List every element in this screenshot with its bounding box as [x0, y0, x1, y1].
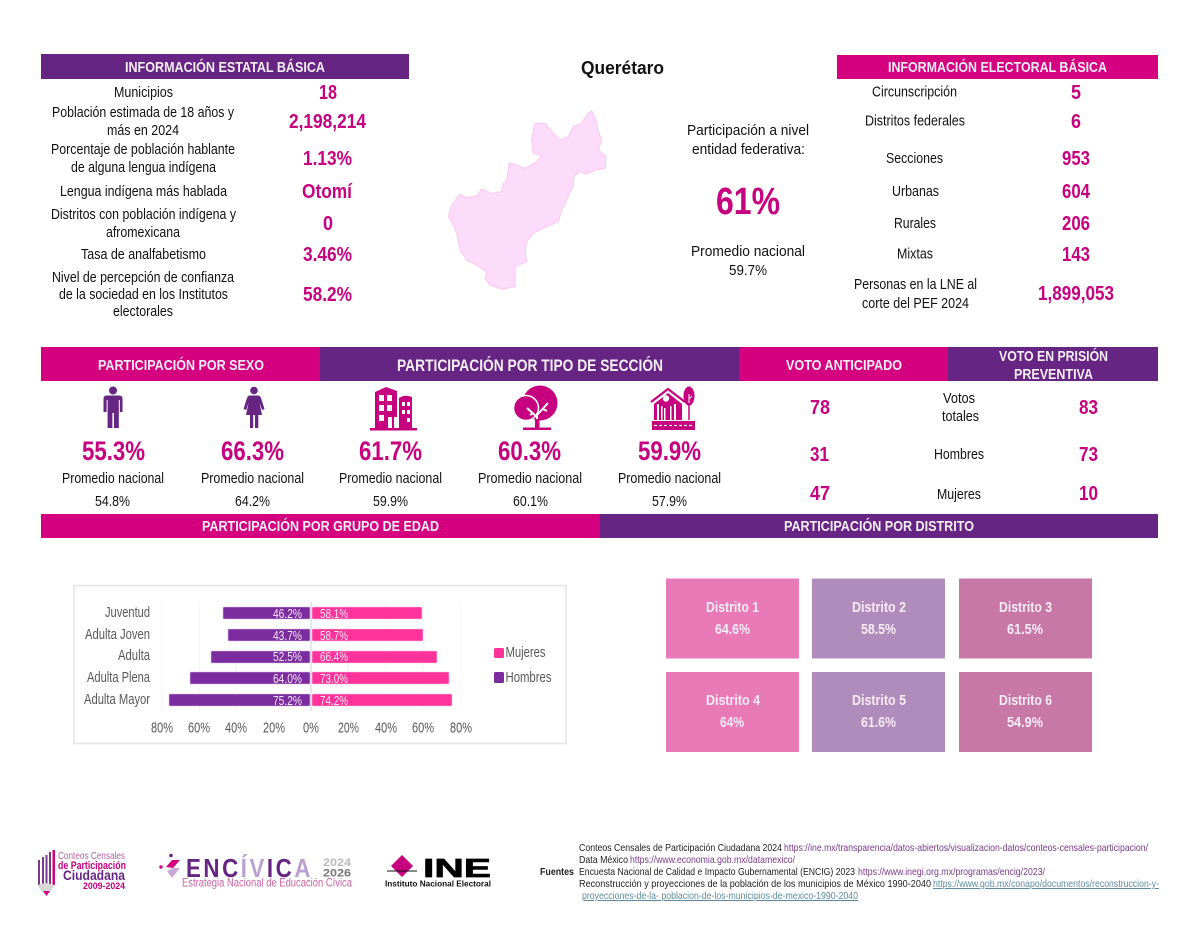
- stat: hombres: [62, 436, 164, 510]
- logo: INE: [385, 853, 491, 888]
- row: urbanas: Urbanas: [892, 183, 939, 200]
- row: nivel de confianza: 58.2%: [303, 284, 352, 306]
- logo: conteos censales: 2009-2024: [83, 881, 126, 892]
- card: distrito 3: Distrito 3: [999, 599, 1052, 616]
- legend: Mujeres: [506, 644, 546, 661]
- big number: 61%: 61%: [716, 181, 780, 223]
- axis labels: 20%: [263, 720, 285, 736]
- stat: rural: 60.3%: [498, 436, 561, 466]
- axis labels: 80%: [151, 720, 173, 736]
- legend: [494, 644, 552, 686]
- row: personas en la LNE: [854, 276, 1114, 312]
- row: mixtas: 143: [1062, 244, 1090, 266]
- axis labels: 20%: [338, 720, 359, 736]
- row: secciones: Secciones: [886, 150, 943, 167]
- panel: información electoral básica: [837, 55, 1158, 312]
- row: votos totales: totales: [942, 408, 979, 425]
- card: distrito 4: [666, 672, 799, 752]
- row: mujeres: [810, 483, 1098, 505]
- band: voto en prisión preventiva: PREVENTIVA: [1014, 366, 1093, 383]
- text: promedio nacional: Promedio nacional: [691, 243, 805, 260]
- category labels: Adulta Plena: [87, 669, 150, 686]
- axis labels: 40%: [375, 720, 397, 736]
- axis labels: 60%: [188, 720, 210, 736]
- bars: hombres: [169, 607, 310, 706]
- category labels: Adulta Mayor: [84, 691, 150, 708]
- stat: rural: [478, 436, 582, 510]
- map: Querétaro: [448, 111, 606, 289]
- stat: mujeres: 66.3%: [221, 436, 284, 466]
- row: municipios: 18: [319, 82, 337, 104]
- band: participación por sexo: PARTICIPACIÓN POR SEXO: [98, 356, 264, 374]
- row: población estimada: [52, 104, 367, 139]
- icon: sección mixta: [651, 386, 695, 430]
- icon: sección rural: [514, 386, 558, 430]
- row: urbanas: [892, 181, 1091, 203]
- row: personas en la LNE: corte del PEF 2024: [862, 295, 969, 312]
- row: nivel de confianza: Nivel de percepción de confianza: [52, 269, 235, 286]
- row: mixtas: [897, 244, 1090, 266]
- band: participación por grupo de edad: PARTICIPACIÓN POR GRUPO DE EDAD: [202, 517, 439, 535]
- band: participación por distrito: [600, 514, 1158, 538]
- text block: fuentes: https://www.inegi.org.mx/programas/encig/2023/: [858, 866, 1045, 878]
- stat: mixta: [618, 436, 721, 510]
- stat: urbana: [339, 436, 442, 510]
- row: tasa de analfabetismo: 3.46%: [303, 244, 352, 266]
- row: población estimada: más en 2024: [107, 122, 179, 139]
- row: personas en la LNE: Personas en la LNE al: [854, 276, 977, 293]
- band: participación por sexo: [41, 347, 320, 381]
- axis labels: 80%: [450, 720, 472, 736]
- card: distrito 1: Distrito 1: [706, 599, 759, 616]
- stat: urbana: 59.9%: [373, 493, 408, 510]
- text block: fuentes: Encuesta Nacional de Calidad e Impacto Gubernamental (ENCIG) 2023: [579, 866, 855, 878]
- row: tasa de analfabetismo: Tasa de analfabetismo: [81, 246, 206, 263]
- legend: Hombres: [506, 669, 552, 686]
- stat: hombres: Promedio nacional: [62, 470, 164, 487]
- row: nivel de confianza: electorales: [113, 303, 173, 320]
- stat: mixta: Promedio nacional: [618, 470, 721, 487]
- card: distrito 6: Distrito 6: [999, 692, 1052, 709]
- panel: participación por distrito: [666, 578, 1092, 752]
- row: tasa de analfabetismo: [81, 244, 352, 266]
- row: secciones: 953: [1062, 148, 1090, 170]
- row: lengua más hablada: Lengua indígena más hablada: [60, 183, 228, 200]
- row: mujeres: Mujeres: [937, 486, 981, 503]
- row: municipios: Municipios: [114, 84, 173, 101]
- axis labels: 60%: [412, 720, 434, 736]
- bar values: hombres: [273, 606, 302, 708]
- icon: hombre: [104, 386, 122, 428]
- row: urbanas: 604: [1062, 181, 1091, 203]
- row: circunscripción: [872, 82, 1081, 104]
- text block: fuentes: Fuentes: [540, 866, 574, 878]
- row: distritos federales: [865, 111, 1081, 133]
- row: lengua indígena porcentaje: 1.13%: [303, 148, 352, 170]
- band: voto en prisión preventiva: [948, 347, 1158, 383]
- row: población estimada: Población estimada de 18 años y: [52, 104, 234, 121]
- band: voto anticipado: [739, 347, 948, 381]
- logo: INE: Instituto Nacional Electoral: [385, 880, 491, 888]
- title: Querétaro: [581, 58, 664, 78]
- card: distrito 1: [666, 578, 799, 658]
- panel: participación a nivel entidad: [687, 122, 809, 279]
- bar values: mujeres: 73.0%: [320, 671, 348, 686]
- bar values: mujeres: [320, 606, 348, 708]
- row: circunscripción: 5: [1071, 82, 1081, 104]
- stat: hombres: 54.8%: [95, 493, 130, 510]
- category labels: Adulta: [118, 647, 150, 664]
- row: lengua indígena porcentaje: Porcentaje de población hablante: [51, 141, 235, 158]
- axis labels: 0%: [303, 720, 319, 736]
- row: nivel de confianza: [52, 269, 352, 320]
- bars: mujeres: [312, 607, 452, 706]
- logo: encívica: [159, 853, 352, 890]
- stat: mixta: 59.9%: [638, 436, 701, 466]
- table: votos: [810, 390, 1098, 505]
- row: votos totales: 83: [1079, 397, 1098, 419]
- band: participación por grupo de edad: [41, 514, 600, 538]
- bar values: mujeres: 74.2%: [320, 693, 348, 708]
- row: mixtas: Mixtas: [897, 246, 933, 262]
- card: distrito 5: [812, 672, 945, 752]
- band: voto anticipado: VOTO ANTICIPADO: [786, 357, 902, 374]
- logo: encívica: Estrategia Nacional de Educación Cívica: [182, 876, 352, 890]
- logo: conteos censales: Conteos Censales: [58, 851, 125, 862]
- bar values: hombres: 43.7%: [273, 628, 302, 643]
- card: distrito 4: 64%: [720, 714, 744, 731]
- stat: mujeres: 64.2%: [235, 493, 270, 510]
- row: votos totales: Votos: [943, 390, 975, 407]
- bar values: mujeres: 66.4%: [320, 649, 348, 664]
- text block: fuentes: https://www.economia.gob.mx/datamexico/: [630, 854, 795, 866]
- logo: conteos censales: Ciudadana: [63, 867, 125, 883]
- card: distrito 1: 64.6%: [715, 621, 750, 638]
- row: distritos con población indígena: afromexicana: [106, 224, 181, 241]
- logo: conteos censales: [37, 850, 126, 896]
- text: participación a nivel entidad federativa: Participación a nivel: [687, 122, 809, 139]
- heading: información estatal básica: INFORMACIÓN ESTATAL BÁSICA: [125, 58, 325, 76]
- logo: encívica: 2026: [323, 868, 351, 880]
- row: lengua indígena porcentaje: [51, 141, 352, 176]
- row: mujeres: 47: [810, 483, 830, 505]
- bar values: hombres: 64.0%: [273, 671, 302, 686]
- card: distrito 2: [812, 578, 945, 658]
- row: circunscripción: Circunscripción: [872, 84, 957, 100]
- category labels: [84, 604, 150, 708]
- card: distrito 3: [959, 578, 1092, 658]
- row: rurales: [894, 213, 1090, 235]
- band: participación por tipo de sección: PARTICIPACIÓN POR TIPO DE SECCIÓN: [397, 356, 663, 375]
- text: promedio nacional: 59.7%: [729, 262, 767, 279]
- card: distrito 2: 58.5%: [861, 621, 896, 638]
- card: distrito 6: [959, 672, 1092, 752]
- text: participación a nivel entidad federativa: entidad federativa:: [692, 141, 805, 158]
- stat: urbana: Promedio nacional: [339, 470, 442, 487]
- row: hombres: 73: [1079, 444, 1098, 466]
- row: nivel de confianza: de la sociedad en los Institutos: [59, 286, 228, 303]
- row: distritos con población indígena: 0: [323, 213, 333, 235]
- text: participación a nivel entidad federativa: [687, 122, 809, 158]
- card: distrito 6: 54.9%: [1007, 714, 1043, 731]
- card: distrito 2: Distrito 2: [852, 599, 906, 616]
- row: lengua indígena porcentaje: de alguna lengua indígena: [71, 159, 217, 176]
- text block: fuentes: https://www.gob.mx/conapo/documentos/reconstruccion-y-: [933, 878, 1159, 890]
- row: rurales: Rurales: [894, 215, 936, 232]
- text block: fuentes: Reconstrucción y proyecciones de la población de los municipios de México 1990-2040: [579, 878, 931, 890]
- card: distrito 3: 61.5%: [1007, 621, 1043, 638]
- row: secciones: [886, 148, 1090, 170]
- row: hombres: [810, 444, 1098, 466]
- logo: encívica: ENCÍVICA: [186, 853, 313, 883]
- band: participación por distrito: PARTICIPACIÓN POR DISTRITO: [784, 517, 974, 535]
- bar values: hombres: 75.2%: [273, 693, 302, 708]
- row: mujeres: 10: [1079, 483, 1098, 505]
- text: promedio nacional: [691, 243, 805, 279]
- row: distritos federales: Distritos federales: [865, 112, 965, 130]
- row: lengua más hablada: Otomí: [302, 181, 353, 203]
- icon: sección urbana: [370, 387, 417, 430]
- text block: fuentes: Conteos Censales de Participación Ciudadana 2024: [579, 842, 782, 854]
- row: distritos con población indígena: Distritos con población indígena y: [51, 206, 236, 223]
- stat: rural: Promedio nacional: [478, 470, 582, 487]
- bar chart: participación por grupo de edad: [74, 586, 566, 744]
- row: lengua más hablada: [60, 181, 353, 203]
- stat: mixta: 57.9%: [652, 493, 687, 510]
- row: hombres: Hombres: [934, 446, 984, 463]
- logo: INE: INE: [423, 853, 491, 883]
- bar values: mujeres: 58.7%: [320, 628, 348, 643]
- text block: fuentes: proyecciones-de-la- poblacion-de-los-municipios-de-mexico-1990-2040: [582, 890, 858, 902]
- logo: encívica: 2024: [323, 857, 352, 869]
- stat: mujeres: Promedio nacional: [201, 470, 304, 487]
- axis labels: 40%: [225, 720, 247, 736]
- row: hombres: 31: [810, 444, 829, 466]
- bar values: hombres: 46.2%: [273, 606, 302, 621]
- stat: urbana: 61.7%: [359, 436, 422, 466]
- row: distritos federales: 6: [1071, 111, 1081, 133]
- row: votos totales: 78: [810, 397, 830, 419]
- heading: información electoral básica: [837, 55, 1158, 79]
- row: personas en la LNE: 1,899,053: [1038, 283, 1114, 305]
- band: participación por tipo de sección: [320, 347, 739, 381]
- text block: fuentes: Data México: [579, 854, 628, 866]
- row: rurales: 206: [1062, 213, 1090, 235]
- card: distrito 4: Distrito 4: [706, 692, 761, 709]
- axis labels: [151, 720, 472, 736]
- row: municipios: [114, 82, 337, 104]
- category labels: Adulta Joven: [85, 626, 150, 643]
- bar values: hombres: 52.5%: [273, 649, 302, 664]
- panel: información estatal básica: [41, 54, 409, 320]
- category labels: Juventud: [105, 604, 150, 621]
- card: distrito 5: Distrito 5: [852, 692, 906, 709]
- logo: conteos censales: de Participación: [58, 860, 126, 872]
- row: votos totales: [810, 390, 1098, 425]
- stat: rural: 60.1%: [513, 493, 548, 510]
- card: distrito 5: 61.6%: [861, 714, 896, 731]
- bar values: mujeres: 58.1%: [320, 606, 348, 621]
- band: voto en prisión preventiva: VOTO EN PRISIÓN: [999, 347, 1108, 365]
- row: población estimada: 2,198,214: [289, 111, 367, 133]
- stat: mujeres: [201, 436, 304, 510]
- stat: hombres: 55.3%: [82, 436, 145, 466]
- icon: mujer: [244, 387, 264, 428]
- text block: fuentes: [540, 842, 1159, 902]
- heading: información electoral básica: INFORMACIÓN ELECTORAL BÁSICA: [888, 58, 1107, 76]
- heading: información estatal básica: [41, 54, 409, 79]
- row: distritos con población indígena: [51, 206, 333, 241]
